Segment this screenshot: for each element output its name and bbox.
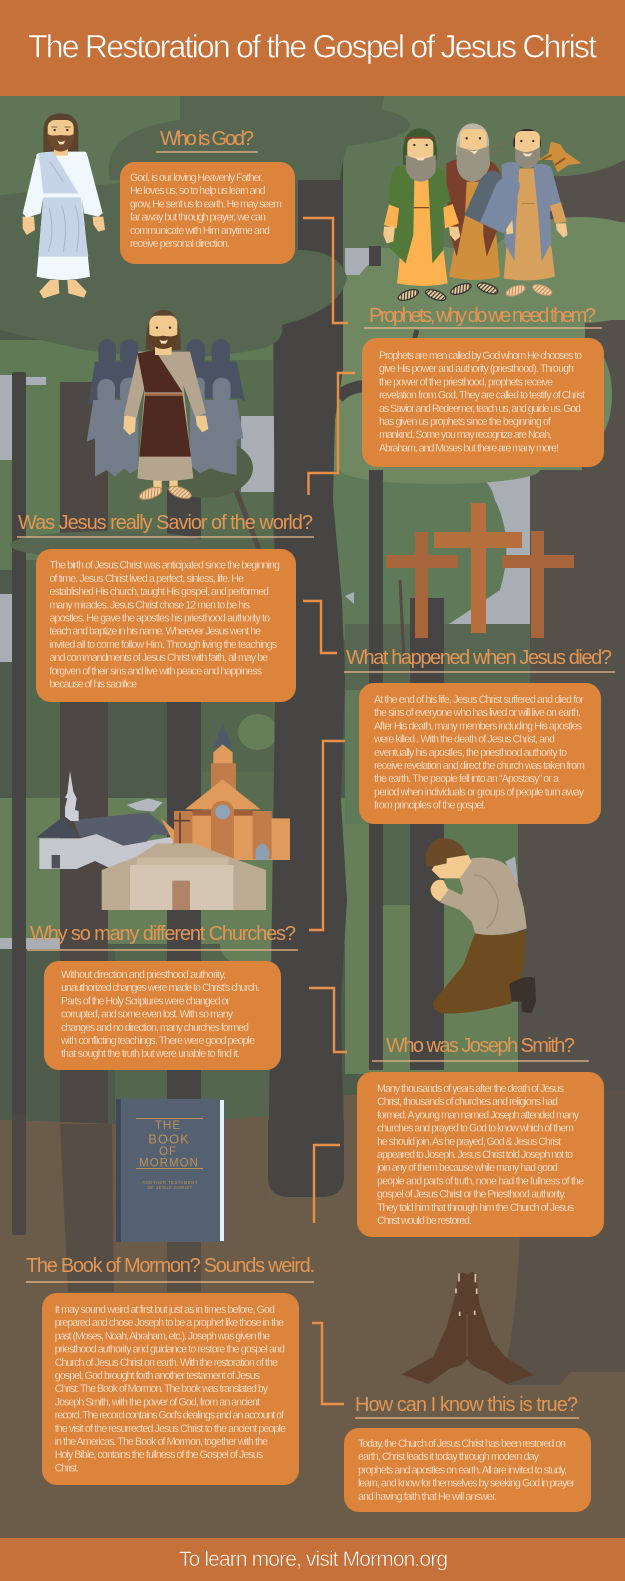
- panel: What happened when Jesus died: [344, 647, 615, 824]
- panel: Why so many different Churches: Why so many different Churches?: [30, 923, 296, 945]
- panel: Who is God: Who is God?: [160, 128, 254, 150]
- icon: churches: [36, 722, 290, 910]
- panel: The Book of Mormon: record. The record contains God’s dealings and an account of: [55, 1410, 284, 1422]
- panel: Why so many different Churches: [27, 923, 298, 1070]
- panel: What happened when Jesus died: the sins of everyone who has lived or will live on earth.: [374, 707, 581, 719]
- panel: Who was Joseph Smith: formed. A young man named Joseph attended many: [377, 1109, 580, 1121]
- icon: Book of Mormon: [116, 1099, 225, 1242]
- panel: How can I know this is true: earth, Christ leads it today through modern day: [358, 1451, 540, 1463]
- panel: How can I know this is true: How can I know this is true?: [355, 1394, 578, 1416]
- panel: Prophets: [362, 305, 604, 467]
- panel: What happened when Jesus died: receive revelation and direct the church was taken from: [374, 760, 585, 772]
- panel: What happened when Jesus died: eventually his apostles, the priesthood authority to: [374, 747, 567, 759]
- icon: Joseph Smith kneeling: [426, 838, 536, 1014]
- panel: The Book of Mormon: It may sound weird at first but just as in times before, God: [55, 1304, 275, 1316]
- grey church: [39, 834, 173, 869]
- panel: Who was Joseph Smith: he should join. As he prayed, God & Jesus Christ: [377, 1136, 561, 1148]
- panel: Was Jesus really Savior: and commandments of Jesus Christ with faith, all may be: [50, 652, 268, 664]
- panel: Was Jesus really Savior: established His church, taught His gospel, and performed: [50, 586, 269, 598]
- panel: Who was Joseph Smith: join any of them because while many had good: [376, 1162, 558, 1174]
- panel: Why so many different Churches: corrupted, and some even lost. With so many: [61, 1009, 234, 1021]
- tan building: [102, 843, 266, 910]
- panel: The Book of Mormon: priesthood authority and guidance to restore the gospel and: [55, 1344, 285, 1356]
- panel: Was Jesus really Savior: Was Jesus really Savior of the world?: [18, 512, 313, 534]
- panel: The Book of Mormon: the visit of the resurrected Jesus Christ to the ancient people: [55, 1423, 286, 1435]
- panel: The Book of Mormon: [26, 1255, 315, 1485]
- panel: The Book of Mormon: in the Americas. The Book of Mormon, together with the: [55, 1436, 268, 1448]
- middle prophet: [449, 180, 500, 280]
- panel: Prophets: Abraham, and Moses but there are many more!: [379, 442, 559, 454]
- left prophet: [397, 180, 448, 286]
- panel: The Book of Mormon: prepared and chose Joseph to be a prophet like those in the: [55, 1317, 284, 1329]
- right brown trunk: [518, 470, 625, 1360]
- panel: The Book of Mormon: Joseph Smith, with the power of God, from an ancient: [55, 1396, 260, 1408]
- right column backgrounds: [330, 275, 625, 480]
- panel: Who was Joseph Smith: [357, 1035, 604, 1237]
- sky patches: [0, 375, 12, 460]
- panel: Was Jesus really Savior: of time. Jesus Christ lived a perfect, sinless, life. He: [50, 573, 244, 585]
- thin branches: [400, 580, 432, 700]
- panel: Who was Joseph Smith: Christ, thousands of churches and religions had: [377, 1096, 558, 1108]
- panel: The Book of Mormon: The Book of Mormon? Sounds weird.: [26, 1255, 315, 1277]
- giraffes: [538, 142, 582, 172]
- icon: Book of Mormon: ANOTHER TESTAMENT: [142, 1180, 198, 1185]
- panel: Was Jesus really Savior: [17, 512, 314, 702]
- right canopy: [568, 347, 612, 443]
- icon: Jesus with apostles: [87, 310, 245, 502]
- panel: The Book of Mormon: past (Moses, Noah, Abraham, etc.). Joseph was given the: [55, 1330, 270, 1342]
- panel: Who was Joseph Smith: Many thousands of years after the death of Jesus: [377, 1083, 564, 1095]
- panel: Prophets: as Savior and Redeemer, teach us, and guide us. God: [379, 403, 581, 415]
- panel: The Book of Mormon: gospel, God brought forth another testament of Jesus: [55, 1370, 260, 1382]
- mid greens left: [0, 340, 273, 570]
- header banner: [0, 0, 625, 96]
- icon: praying hands: [402, 1272, 533, 1384]
- panel: How can I know this is true: learn, and know for themselves by seeking God in prayer: [358, 1478, 575, 1490]
- panel: Why so many different Churches: unauthorized changes were made to Christ’s church.: [61, 982, 260, 994]
- icon: Jesus in white robe: [23, 113, 105, 298]
- panel: Who is God: communicate with Him anytime and: [130, 225, 270, 237]
- panel: Was Jesus really Savior: teach and baptize in his name. Wherever Jesus went he: [50, 626, 261, 638]
- panel: Prophets: Prophets are men called by God whom He chooses to: [379, 350, 582, 362]
- icon: Book of Mormon: OF JESUS CHRIST: [147, 1185, 193, 1190]
- right prophet: [504, 168, 555, 280]
- panel: The Book of Mormon: Christ.: [55, 1462, 79, 1474]
- panel: Was Jesus really Savior: many miracles. Jesus Christ chose 12 men to be his: [50, 599, 250, 611]
- panel: Why so many different Churches: Parts of the Holy Scriptures were changed or: [61, 995, 230, 1007]
- panel: What happened when Jesus died: After His death, many members including His apostles: [374, 720, 582, 732]
- panel: The Book of Mormon: Church of Jesus Christ on earth. With the restoration of the: [55, 1357, 278, 1369]
- panel: Who is God: grow, He sent us to earth. He may seem: [130, 198, 282, 210]
- panel: Was Jesus really Savior: forgiven of their sins and live with peace and happiness: [50, 665, 262, 677]
- panel: Prophets: the power of the priesthood, prophets receive: [379, 376, 553, 388]
- panel: Who was Joseph Smith: Christ would be restored.: [377, 1215, 472, 1227]
- panel: What happened when Jesus died: were killed . With the death of Jesus Christ, and: [373, 734, 555, 746]
- trunks: [60, 382, 108, 1293]
- footer banner: To learn more, visit Mormon.org: [179, 1548, 448, 1571]
- panel: Prophets: has given us prophets since the beginning of: [379, 416, 551, 428]
- icon: three crosses: [386, 503, 574, 638]
- panel: Who was Joseph Smith: They told him that through him the Church of Jesus: [377, 1202, 574, 1214]
- stone tablets: [464, 171, 502, 228]
- panel: What happened when Jesus died: period when individuals or groups of people turn away: [374, 786, 585, 798]
- panel: Who was Joseph Smith: people and parts of truth, none had the fullness of the: [377, 1175, 584, 1187]
- icon: Book of Mormon: BOOK: [148, 1132, 190, 1146]
- panel: What happened when Jesus died: from principles of the gospel.: [374, 800, 486, 812]
- icon: Book of Mormon: OF: [159, 1146, 177, 1158]
- panel: Who is God: He loves us, so to help us learn and: [130, 185, 266, 197]
- header banner: The Restoration of the Gospel of Jesus Christ: [28, 28, 597, 64]
- panel: Who was Joseph Smith: gospel of Jesus Christ or the Priesthood authority.: [377, 1189, 566, 1201]
- panel: Who was Joseph Smith: Who was Joseph Smith?: [386, 1035, 575, 1057]
- panel: How can I know this is true: Today, the Church of Jesus Christ has been restored on: [358, 1438, 566, 1450]
- panel: Prophets: Prophets, why do we need them?: [369, 305, 596, 327]
- panel: Who is God: God, is our loving Heavenly Father.: [130, 172, 264, 184]
- footer banner: [0, 1538, 625, 1581]
- panel: Prophets: give His power and authority (priesthood). Through: [379, 363, 574, 375]
- icon: three prophets: [383, 123, 582, 303]
- orange church: [161, 812, 290, 860]
- connector arrows: [303, 218, 355, 1404]
- panel: Who is God: receive personal direction.: [130, 238, 230, 250]
- panel: Was Jesus really Savior: The birth of Jesus Christ was anticipated since the beginning: [50, 560, 280, 572]
- panel: Why so many different Churches: that sought the truth but were unable to find it.: [61, 1048, 240, 1060]
- panel: Why so many different Churches: with conflicting teachings. There were good people: [60, 1035, 255, 1047]
- panel: What happened when Jesus died: At the end of his life, Jesus Christ suffered and died for: [374, 694, 584, 706]
- panel: Who is God: [120, 128, 295, 264]
- panel: The Book of Mormon: Holy Bible, contains the fullness of the Gospel of Jesus: [55, 1449, 263, 1461]
- panel: What happened when Jesus died: the earth. The people fell into an “Apostasy” or a: [374, 773, 559, 785]
- panel: Why so many different Churches: changes and no direction, many churches formed: [61, 1022, 249, 1034]
- ground: [0, 1095, 625, 1538]
- panel: Prophets: mankind. Some you may recognize are Noah,: [379, 429, 552, 441]
- panel: Was Jesus really Savior: invited all to come follow Him. Through living the teachings: [50, 639, 277, 651]
- panel: The Book of Mormon: Christ: The Book of Mormon. The book was translated by: [55, 1383, 269, 1395]
- panel: What happened when Jesus died: What happened when Jesus died?: [346, 647, 612, 669]
- panel: Prophets: revelation from God. They are called to testify of Christ: [379, 390, 585, 402]
- icon: Book of Mormon: MORMON: [139, 1158, 199, 1170]
- panel: How can I know this is true: and having faith that He will answer.: [358, 1491, 497, 1503]
- panel: Who was Joseph Smith: appeared to Joseph. Jesus Christ told Joseph not to: [377, 1149, 573, 1161]
- panel: Was Jesus really Savior: because of his sacrifice: [50, 678, 137, 690]
- icon: Book of Mormon: THE: [155, 1120, 181, 1132]
- panel: How can I know this is true: prophets and apostles on earth. All are invited to study,: [358, 1464, 567, 1476]
- left canopy: [109, 96, 384, 180]
- panel: How can I know this is true: [344, 1394, 591, 1512]
- panel: Who is God: far away but through prayer, we can: [130, 212, 266, 224]
- panel: Was Jesus really Savior: apostles. He gave the apostles his priesthood authority to: [50, 612, 270, 624]
- panel: Who was Joseph Smith: churches and prayed to God to know which of them: [377, 1123, 574, 1135]
- panel: Why so many different Churches: Without direction and priesthood authority,: [61, 969, 226, 981]
